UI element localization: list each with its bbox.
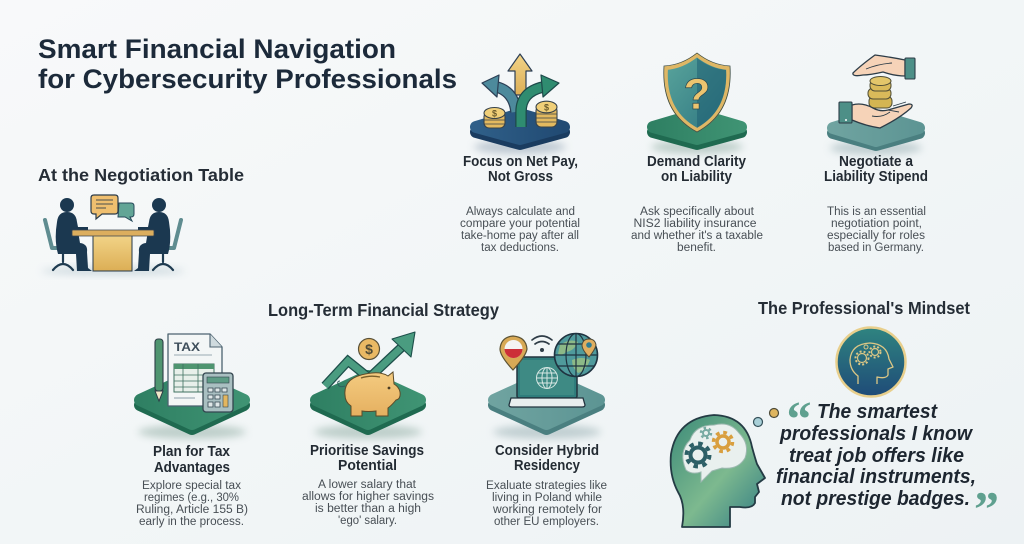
- text: plan for tax advantages body: Explore special tax: [142, 480, 241, 492]
- icon: diverging arrows and coins on blue platform: $: [492, 108, 497, 118]
- text: plan for tax advantages body: Ruling, Article 155 B): [136, 504, 248, 516]
- text: negotiate a liability stipend body: especially for roles: [827, 230, 925, 242]
- text: negotiate a liability stipend body: based in Germany.: [828, 242, 924, 254]
- panel: focus on net pay: [460, 54, 580, 254]
- text: demand clarity body: benefit.: [677, 242, 716, 254]
- text: prioritise savings potential body: A lower salary that: [318, 479, 417, 491]
- icon: thought bubble dots: [754, 408, 778, 426]
- quote: professionals I know: [779, 422, 974, 445]
- text: focus on net pay body: [460, 206, 580, 254]
- icon: shield with question mark on green platform: ?: [684, 70, 710, 119]
- text: prioritise savings potential body: [302, 479, 434, 527]
- text: plan for tax advantages body: regimes (e.g., 30%: [144, 492, 239, 504]
- quote: treat job offers like: [789, 444, 964, 467]
- heading: prioritise savings potential: Prioritise Savings: [310, 443, 424, 459]
- icon: opening quotation mark: “: [786, 390, 812, 446]
- icon: shield with question mark on green platform: [651, 53, 743, 154]
- text: demand clarity body: Ask specifically about: [640, 206, 755, 218]
- heading: plan for tax advantages: Plan for Tax: [153, 444, 230, 460]
- text: negotiate a liability stipend body: negotiation point,: [831, 218, 922, 230]
- heading: demand clarity: Demand Clarity: [647, 154, 746, 170]
- heading: the professional's mindset: The Professional's Mindset: [758, 298, 970, 318]
- heading: consider hybrid residency: Residency: [514, 458, 580, 474]
- text: focus on net pay body: tax deductions.: [481, 242, 559, 254]
- icon: diverging arrows and coins on blue platform: $: [544, 102, 549, 112]
- text: consider hybrid residency body: other EU employers.: [494, 516, 599, 528]
- icon: piggy bank, coin and rising arrow on green platform: [314, 332, 422, 439]
- icon: round badge with head and gears: [836, 328, 906, 396]
- text: plan for tax advantages body: [136, 480, 248, 528]
- icon: laptop, location pin, wifi and globe on teal platform: [493, 334, 601, 439]
- title: [38, 34, 457, 94]
- quote: [776, 390, 999, 536]
- quote: financial instruments,: [776, 465, 976, 488]
- text: consider hybrid residency body: living in Poland while: [492, 492, 602, 504]
- heading: focus on net pay: Focus on Net Pay,: [463, 154, 578, 170]
- heading: focus on net pay: Not Gross: [488, 169, 553, 185]
- icon: head silhouette with gears in brain: [671, 415, 765, 527]
- text: consider hybrid residency body: Exaluate strategies like: [486, 480, 607, 492]
- section: the professional's mindset: [671, 298, 999, 536]
- icon: tax form, pen and calculator on green platform: [138, 334, 246, 439]
- heading: negotiate a liability stipend: Liability Stipend: [824, 169, 928, 185]
- text: demand clarity body: [631, 206, 763, 254]
- heading: focus on net pay: [463, 154, 578, 185]
- icon: hands protecting coins on teal platform: [830, 55, 922, 155]
- heading: demand clarity: [647, 154, 746, 185]
- icon: closing quotation mark: ”: [974, 480, 999, 536]
- text: focus on net pay body: take-home pay after all: [461, 230, 579, 242]
- quote: not prestige badges.: [781, 487, 970, 510]
- heading: plan for tax advantages: [153, 444, 230, 476]
- text: demand clarity body: NIS2 liability insurance: [634, 218, 756, 230]
- text: demand clarity body: and whether it's a taxable: [631, 230, 763, 242]
- title: Smart Financial Navigation: [38, 34, 396, 64]
- icon: two people negotiating at a table: [41, 195, 185, 275]
- heading: consider hybrid residency: [495, 443, 599, 474]
- text: prioritise savings potential body: 'ego' salary.: [338, 515, 397, 527]
- icon: tax form, pen and calculator on green platform: TAX: [174, 340, 200, 354]
- text: consider hybrid residency body: [486, 480, 607, 528]
- heading: prioritise savings potential: [310, 443, 424, 474]
- text: negotiate a liability stipend body: [827, 206, 926, 254]
- text: consider hybrid residency body: working remotely for: [492, 504, 602, 516]
- panel: consider hybrid residency: [486, 334, 607, 528]
- heading: negotiate a liability stipend: [824, 154, 928, 185]
- panel: negotiate a liability stipend: [824, 55, 928, 254]
- panel: prioritise savings potential: [302, 332, 434, 527]
- panel: plan for tax advantages: [136, 334, 248, 528]
- panel: demand clarity on liability: [631, 53, 763, 254]
- text: prioritise savings potential body: is better than a high: [315, 503, 421, 515]
- icon: diverging arrows and coins on blue platform: [474, 54, 566, 154]
- heading: plan for tax advantages: Advantages: [154, 460, 230, 476]
- heading: at the negotiation table: At the Negotiation Table: [38, 165, 244, 185]
- text: prioritise savings potential body: allows for higher savings: [302, 491, 434, 503]
- text: negotiate a liability stipend body: This is an essential: [827, 206, 926, 218]
- text: plan for tax advantages body: early in the process.: [139, 516, 244, 528]
- text: focus on net pay body: Always calculate and: [466, 206, 575, 218]
- text: focus on net pay body: compare your potential: [460, 218, 580, 230]
- icon: piggy bank, coin and rising arrow on green platform: $: [365, 341, 373, 357]
- heading: negotiate a liability stipend: Negotiate a: [839, 154, 914, 170]
- heading: long-term financial strategy: Long-Term Financial Strategy: [268, 300, 499, 320]
- section: at the negotiation table: [38, 165, 244, 275]
- title: for Cybersecurity Professionals: [38, 64, 457, 94]
- heading: consider hybrid residency: Consider Hybrid: [495, 443, 599, 459]
- heading: prioritise savings potential: Potential: [338, 458, 397, 474]
- heading: demand clarity: on Liability: [661, 169, 732, 185]
- quote: The smartest: [817, 400, 938, 423]
